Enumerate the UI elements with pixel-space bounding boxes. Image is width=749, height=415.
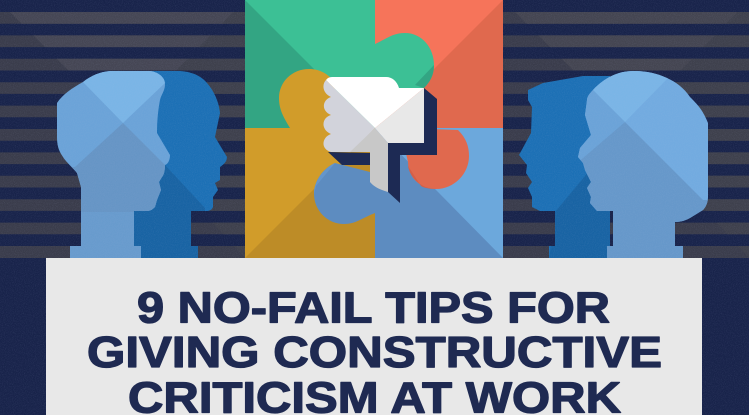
piece: green (245, 0, 375, 128)
title: 9 NO-FAIL TIPS FOR (137, 284, 610, 332)
thumb facet: top (326, 77, 424, 128)
film grain (0, 0, 749, 258)
icon: thumbs down (323, 77, 437, 203)
tab: green (375, 33, 434, 100)
title: GIVING CONSTRUCTIVE (87, 328, 662, 377)
thumb facet: bottom (350, 128, 388, 192)
head: back right (519, 76, 610, 258)
title panel (46, 258, 702, 415)
head: front right (575, 60, 710, 260)
background stripes (0, 0, 749, 258)
piece: yellow (245, 128, 375, 258)
thumb facet: right (375, 88, 424, 143)
piece: blue (375, 128, 503, 258)
tab: blue (314, 150, 375, 224)
head pair: left (57, 71, 227, 258)
head: front left (57, 71, 170, 258)
title (87, 284, 662, 415)
thumb shadow (328, 88, 437, 203)
head pair: right (515, 60, 710, 260)
tab: yellow (279, 69, 335, 128)
puzzle: four coloured pieces (245, 0, 503, 258)
tab: orange (400, 128, 469, 189)
head: back left (134, 71, 227, 258)
thumb facet: left (323, 80, 375, 152)
piece: orange (375, 0, 503, 128)
